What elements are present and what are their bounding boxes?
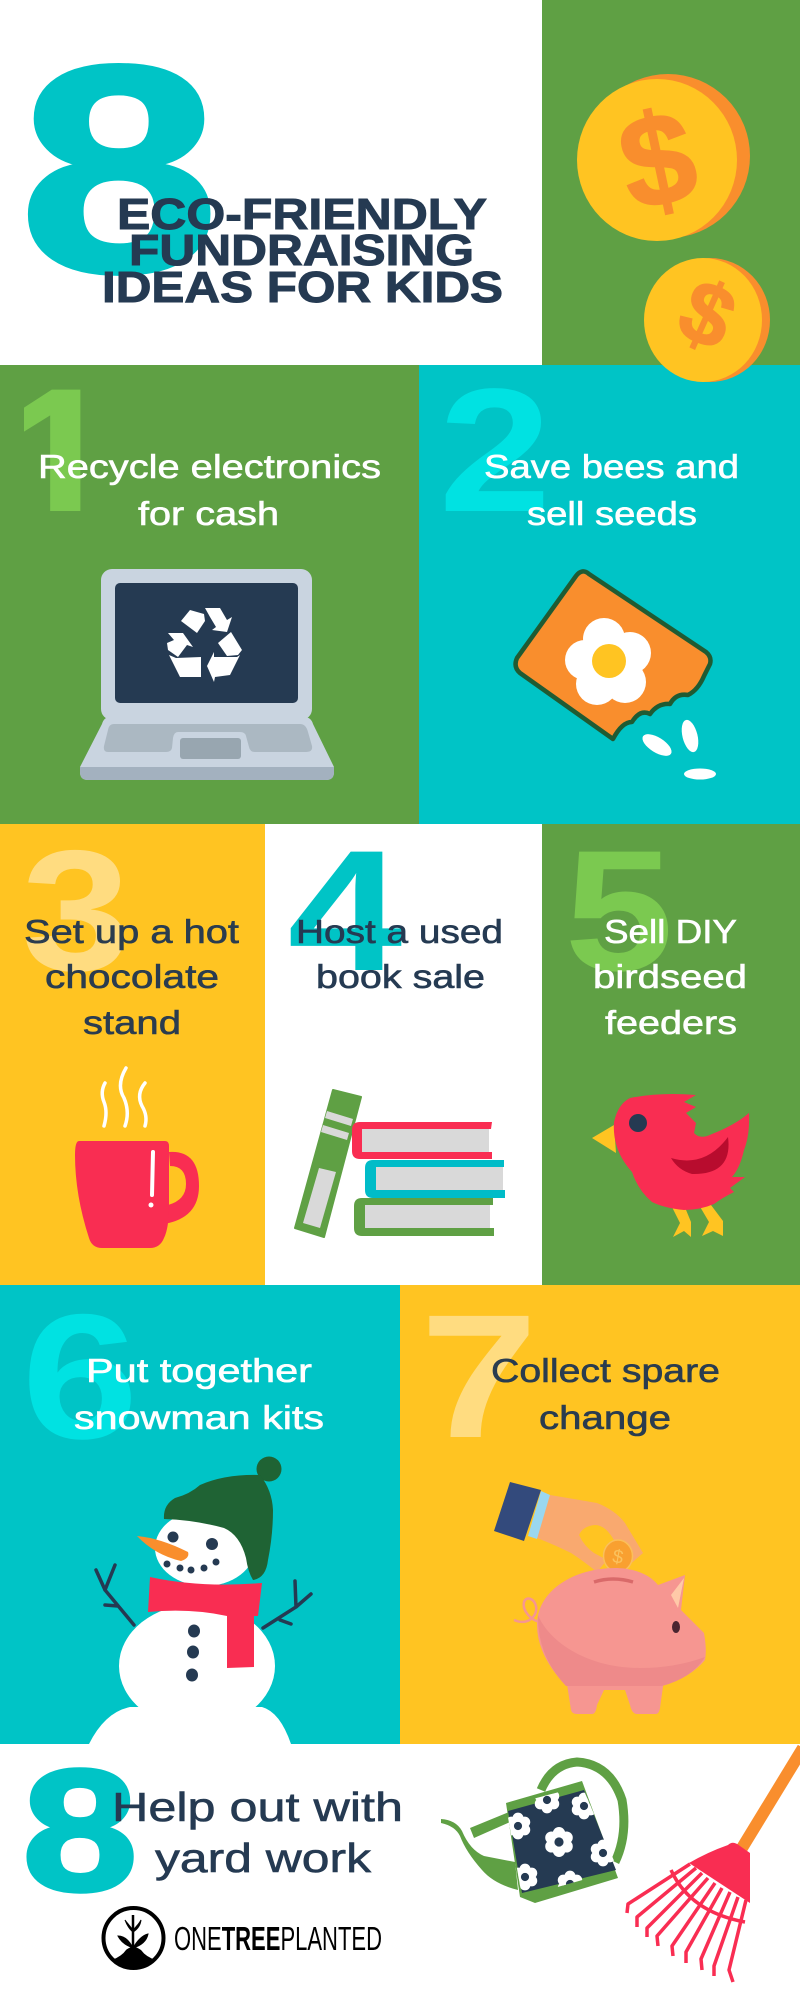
icon: snowman xyxy=(89,1456,311,1744)
icon: hand and piggy bank xyxy=(494,1482,706,1714)
heading: spare change: change xyxy=(539,1399,671,1436)
icon: seed packet xyxy=(516,571,716,780)
logo: One Tree Planted xyxy=(104,1908,382,1968)
heading: snowman kits: Put together xyxy=(86,1352,312,1389)
heading: book sale: book sale xyxy=(316,958,485,995)
icon: laptop with recycling symbol xyxy=(80,569,334,780)
heading: hot chocolate xyxy=(24,913,239,1041)
heading: birdseed feeders xyxy=(593,913,747,1041)
number 1: 1 xyxy=(0,342,121,588)
number 7: 7 xyxy=(420,1279,538,1475)
heading: snowman kits xyxy=(74,1352,324,1436)
number 3: 3 xyxy=(21,815,131,1007)
icon: large coin: $ xyxy=(607,81,708,239)
icon: small coin: $ xyxy=(665,259,750,369)
panel: 3 hot chocolate xyxy=(0,815,265,1285)
panel: 8 yard work xyxy=(26,1744,800,1982)
number 8: 8 xyxy=(22,1734,138,1927)
panel: 5 birdseed feeders xyxy=(542,815,800,1285)
heading: spare change xyxy=(491,1352,720,1436)
heading: birdseed feeders: Sell DIY xyxy=(604,913,737,950)
title: FUNDRAISING xyxy=(129,226,474,275)
panel: 1 recycle electronics xyxy=(0,342,419,824)
heading: birdseed feeders: feeders xyxy=(605,1004,737,1041)
heading: hot chocolate: stand xyxy=(83,1004,181,1041)
title xyxy=(102,190,503,312)
number 6: 6 xyxy=(22,1278,138,1476)
number 4: 4 xyxy=(288,815,402,1007)
heading: yard work: yard work xyxy=(155,1835,372,1881)
heading: save bees xyxy=(484,448,739,532)
icon: watering can xyxy=(441,1762,624,1903)
heading: recycle electronics xyxy=(38,448,381,532)
logo: One Tree Planted: ONETREEPLANTED xyxy=(174,1920,382,1957)
panel: 4 used book sale xyxy=(265,815,542,1285)
heading: save bees: Save bees and xyxy=(484,448,739,485)
heading: yard work xyxy=(112,1784,403,1881)
panel: 2 seeds xyxy=(419,352,800,824)
panel: 6 snowman kits xyxy=(0,1278,400,1744)
heading: recycle electronics: Recycle electronics xyxy=(38,448,381,485)
icon: steaming mug xyxy=(75,1068,199,1248)
heading: save bees: sell seeds xyxy=(527,495,697,532)
icon: small coin xyxy=(644,258,770,382)
number 5: 5 xyxy=(564,815,674,1007)
heading: spare change: Collect spare xyxy=(491,1352,720,1389)
heading: birdseed feeders: birdseed xyxy=(593,958,747,995)
icon: large coin xyxy=(577,74,750,241)
panel: header xyxy=(0,0,800,382)
big number 8: 8 xyxy=(19,4,219,334)
title: IDEAS FOR KIDS xyxy=(102,263,503,312)
heading: snowman kits: snowman kits xyxy=(74,1399,324,1436)
icon: rake xyxy=(627,1748,800,1982)
icon: stack of books xyxy=(295,1090,505,1237)
icon: hand and piggy bank: $ xyxy=(611,1546,625,1569)
heading: book sale xyxy=(296,913,503,995)
number 2: 2 xyxy=(439,352,551,549)
panel: 7 spare change xyxy=(400,1279,800,1744)
heading: book sale: Host a used xyxy=(296,913,503,950)
title: ECO-FRIENDLY xyxy=(117,190,487,239)
heading: hot chocolate: chocolate xyxy=(45,958,219,995)
heading: hot chocolate: Set up a hot xyxy=(24,913,239,950)
heading: yard work: Help out with xyxy=(112,1784,403,1830)
heading: recycle electronics: for cash xyxy=(138,495,279,532)
icon: red bird xyxy=(592,1094,749,1237)
